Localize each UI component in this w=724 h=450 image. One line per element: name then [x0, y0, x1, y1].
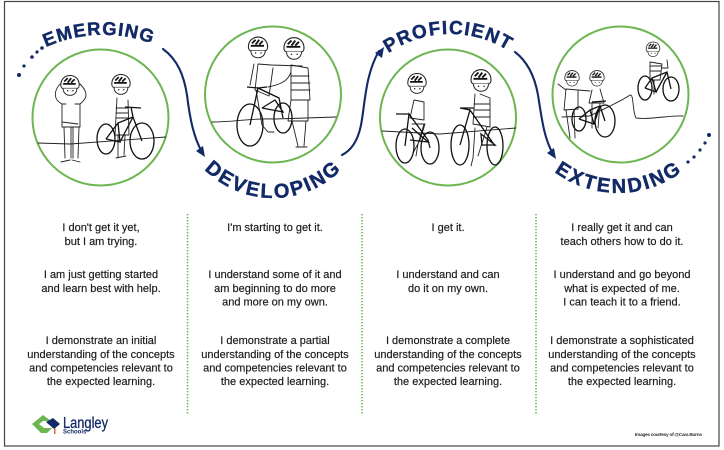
figure: rider one: [396, 74, 439, 164]
text column: extending: what is expected of me.: [563, 283, 680, 295]
figure: teaching pair: [558, 71, 615, 138]
text column: proficient: the expected learning.: [394, 376, 502, 388]
text column: emerging: but I am trying.: [65, 236, 137, 248]
figure: child on bike: [237, 37, 302, 146]
text column: proficient: do it on my own.: [408, 283, 488, 295]
heading: developing: DEVELOPING: [204, 160, 339, 198]
text column: emerging: understanding of the concepts: [27, 349, 175, 361]
text column: extending: I really get it and can: [571, 222, 673, 234]
text column: extending: and competencies relevant to: [550, 362, 694, 374]
text column: proficient: I understand and can: [396, 269, 500, 281]
figure: riding ahead: [638, 42, 679, 101]
text column: emerging: I am just getting started: [44, 269, 158, 281]
text column: developing: [201, 222, 349, 388]
arrow: proficient to extending: [515, 52, 556, 159]
text column: extending: understanding of the concepts: [548, 349, 696, 361]
text column: emerging: I demonstrate an initial: [46, 335, 156, 347]
text column: emerging: and competencies relevant to: [29, 362, 173, 374]
dots: trailing from extending: [686, 133, 711, 164]
arrow: developing to proficient: [342, 47, 384, 155]
logo: Langley Schools: [32, 415, 108, 436]
text column: developing: the expected learning.: [221, 376, 329, 388]
panel: developing illustration: [205, 26, 341, 162]
text column: developing: I understand some of it and: [208, 269, 342, 281]
text column: proficient: and competencies relevant to: [376, 362, 520, 374]
text column: emerging: [27, 222, 175, 388]
text column: proficient: [374, 222, 522, 388]
text column: developing: understanding of the concepts: [201, 349, 349, 361]
logo: Langley Schools: Langley: [63, 415, 108, 432]
text column: developing: and more on my own.: [222, 296, 328, 308]
text column: emerging: and learn best with help.: [41, 283, 161, 295]
text column: extending: I can teach it to a friend.: [563, 296, 681, 308]
heading: emerging: EMERGING: [42, 22, 154, 47]
logo: Langley Schools: Schools: [63, 430, 87, 436]
text column: extending: teach others how to do it.: [561, 236, 683, 248]
panel: emerging illustration: [32, 50, 168, 186]
panel: extending illustration: [552, 26, 688, 162]
text column: developing: I demonstrate a partial: [220, 335, 330, 347]
text column: proficient: I demonstrate a complete: [386, 335, 510, 347]
text column: emerging: I don't get it yet,: [62, 222, 140, 234]
figure: child with bike: [97, 75, 154, 159]
text column: developing: am beginning to do more: [214, 283, 336, 295]
figure: child adjusting helmet: [55, 76, 86, 162]
dividers: [188, 214, 536, 415]
credit: Images courtesy of @Cara Burns: [635, 432, 702, 438]
text column: proficient: I get it.: [431, 222, 465, 234]
text column: extending: [548, 222, 696, 388]
text column: developing: and competencies relevant to: [203, 362, 347, 374]
figure: helper child: [268, 38, 310, 147]
text column: developing: I'm starting to get it.: [227, 222, 323, 234]
text column: extending: I demonstrate a sophisticated: [550, 335, 694, 347]
text column: extending: the expected learning.: [568, 376, 676, 388]
text column: extending: I understand and go beyond: [553, 269, 691, 281]
panel: proficient illustration: [380, 50, 516, 186]
text column: proficient: understanding of the concepts: [374, 349, 522, 361]
text column: emerging: the expected learning.: [47, 376, 155, 388]
arrow: emerging to developing: [163, 49, 205, 157]
heading: proficient: PROFICIENT: [382, 20, 514, 53]
dots: leading to emerging: [17, 46, 44, 77]
figure: rider two: [451, 70, 503, 166]
heading: extending: EXTENDING: [555, 160, 680, 194]
